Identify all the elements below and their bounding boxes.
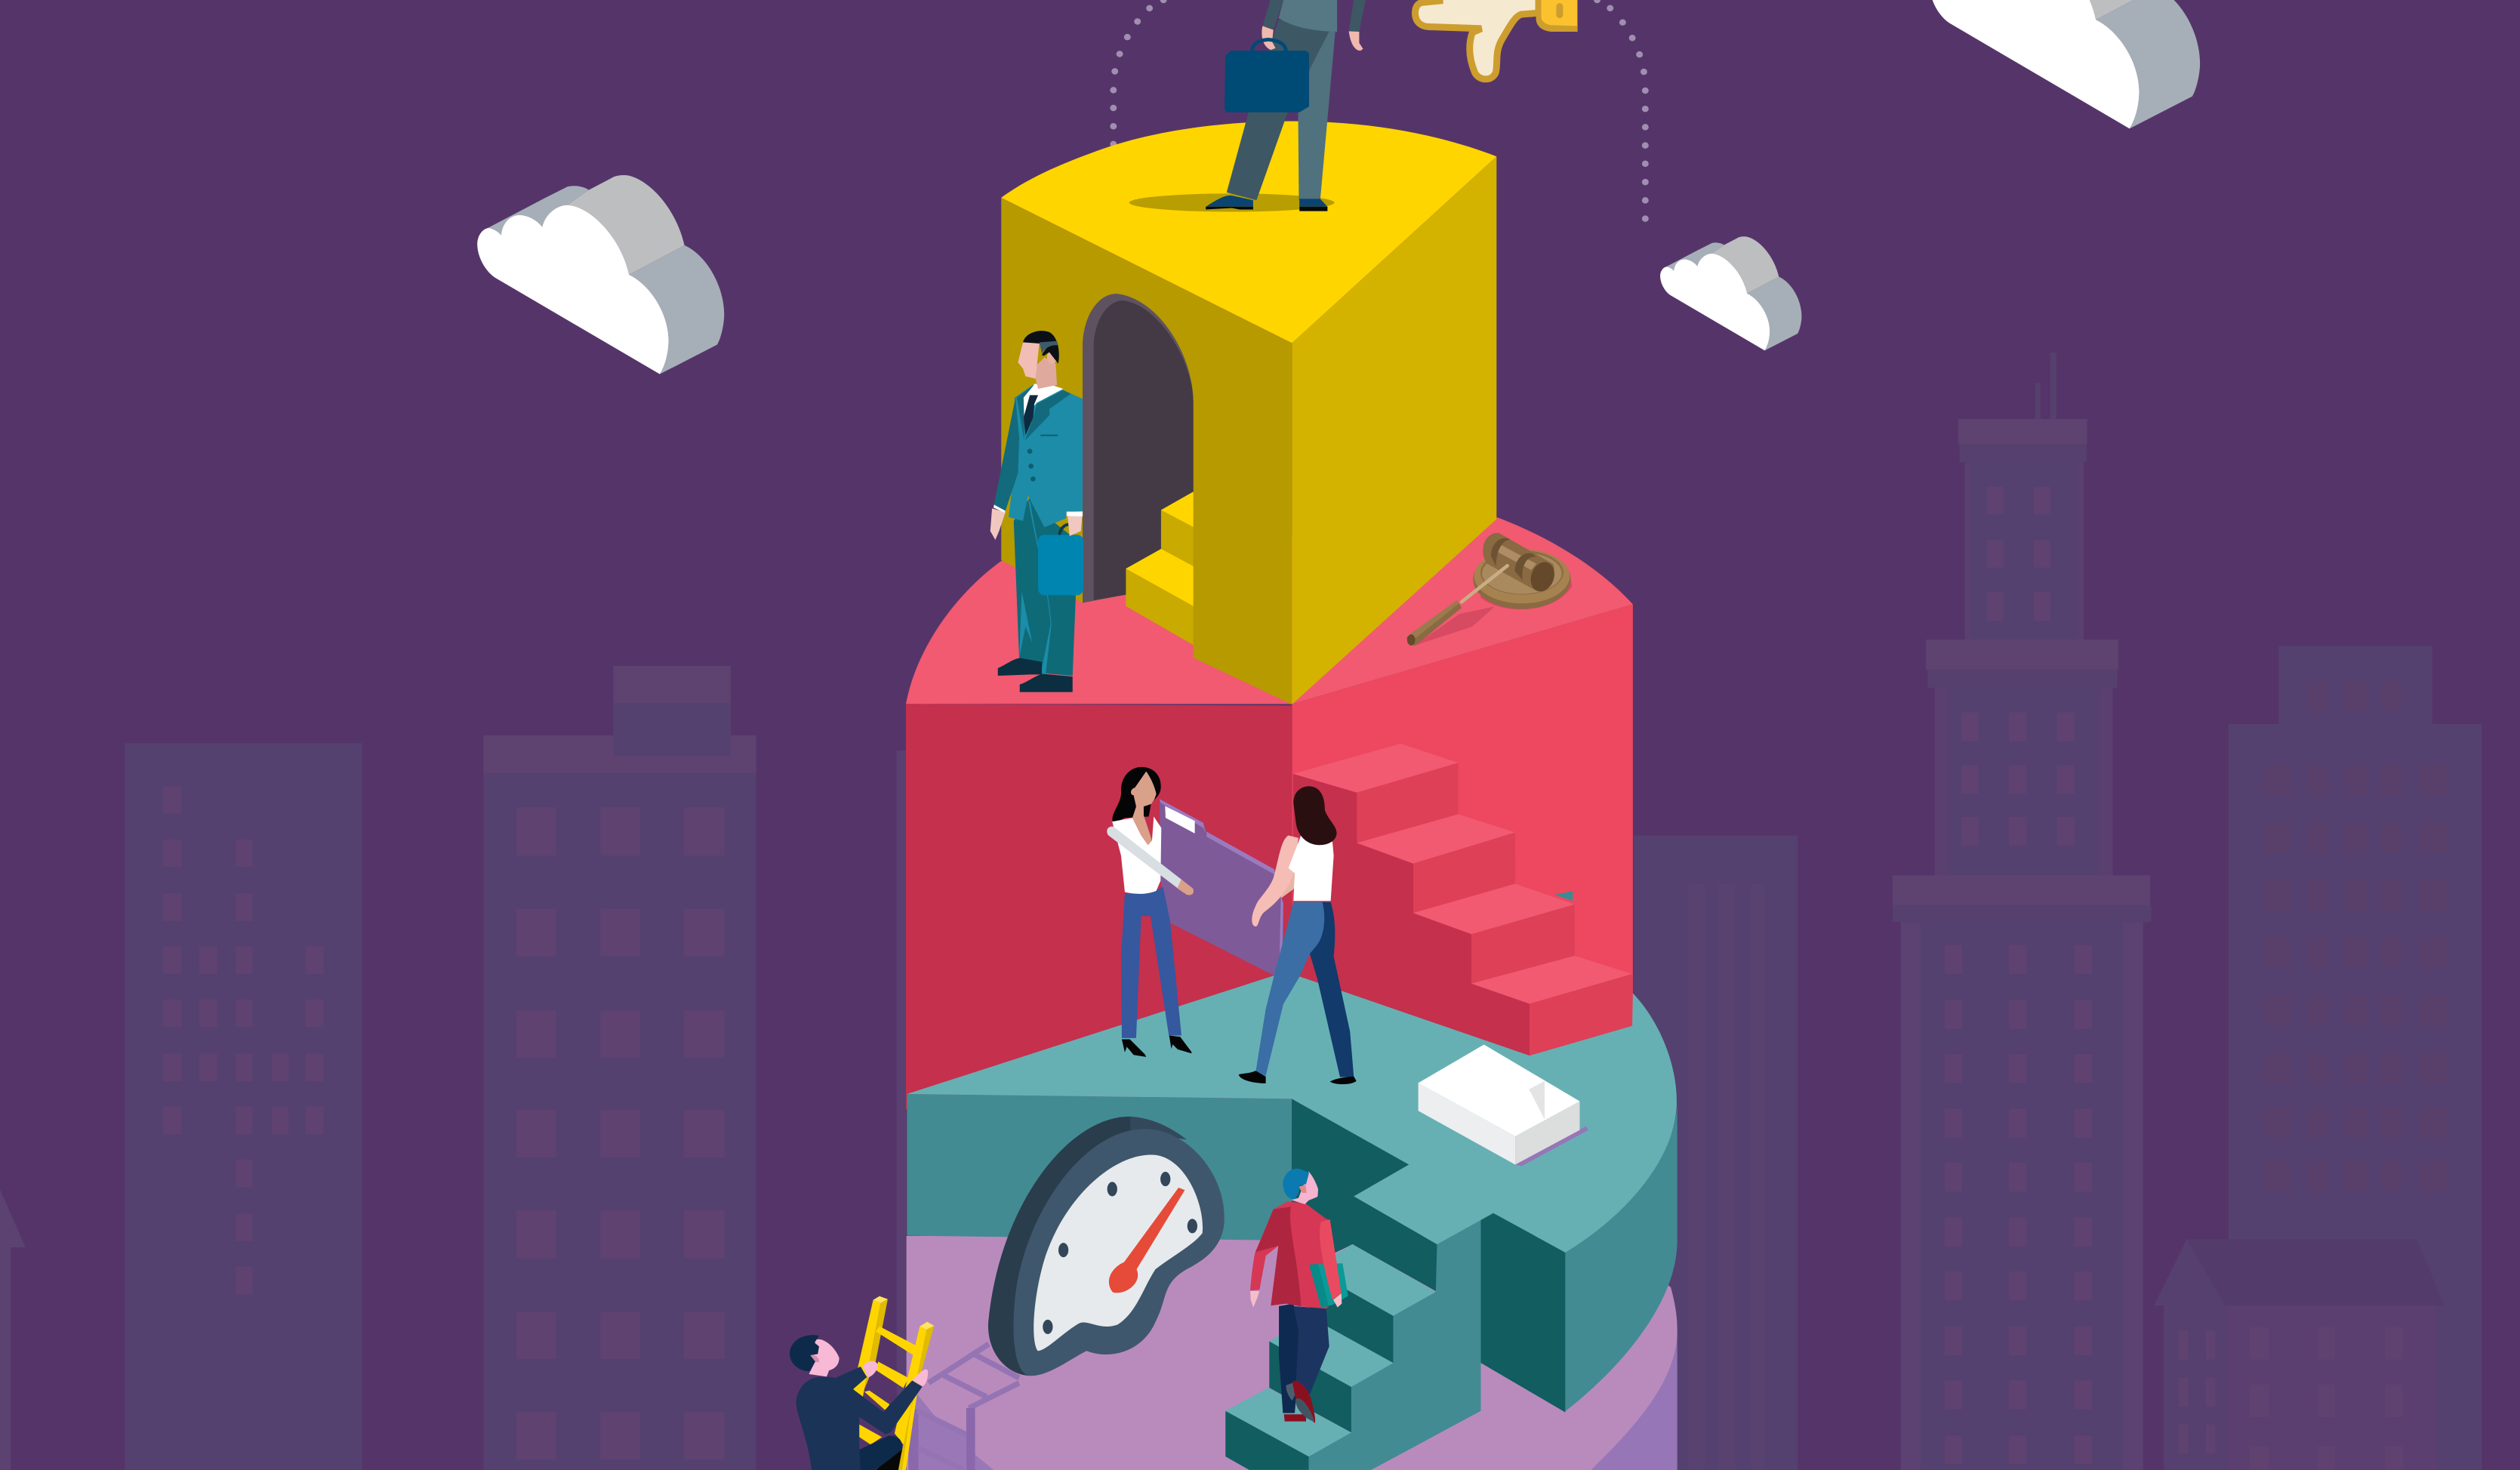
shadow under the top figure bbox=[1129, 193, 1334, 212]
tier: yellow block with arched door bbox=[1001, 122, 1496, 704]
low front building bbox=[2154, 1239, 2445, 1470]
tier: teal block with stairs bbox=[907, 975, 1677, 1470]
folder carried by the two women bbox=[1160, 799, 1283, 976]
figure: woman holding the folder bbox=[1107, 767, 1194, 1057]
red staircase bbox=[1293, 744, 1632, 1058]
figure: woman walking with the folder bbox=[1239, 786, 1357, 1084]
flat ladder and pit on the purple floor bbox=[908, 1344, 1019, 1470]
cloud: small right bbox=[1660, 236, 1801, 350]
icon: thumbs-down hand bbox=[1416, 0, 1578, 79]
building behind the stack bbox=[1634, 836, 1798, 1470]
icon: white box on the teal floor bbox=[1419, 1045, 1588, 1166]
figure: man in teal suit by the door bbox=[990, 331, 1083, 692]
arched doorway bbox=[1083, 294, 1194, 645]
ladder bbox=[848, 1296, 934, 1470]
figure: man with briefcase on top of the tower bbox=[1206, 0, 1366, 211]
icon: melting gauge bbox=[988, 1117, 1225, 1376]
cloud: left bbox=[477, 175, 724, 374]
tall tower bbox=[1893, 353, 2151, 1470]
skyline: right buildings and tower bbox=[1634, 353, 2481, 1470]
icon: gavel bbox=[1406, 533, 1572, 646]
cloud: top right bbox=[1930, 0, 2200, 128]
strip of building left of the stack bbox=[897, 750, 907, 1470]
figure: man climbing a yellow ladder bbox=[790, 1296, 934, 1470]
dotted arcs around the top of the tower bbox=[1110, 0, 1649, 222]
skyline: left buildings bbox=[0, 666, 756, 1470]
figure: man in red jacket on the stairs bbox=[1250, 1169, 1348, 1423]
tier: purple base bbox=[907, 1236, 1677, 1470]
tier: red block bbox=[906, 517, 1633, 1125]
wide stepped building bbox=[2229, 646, 2481, 1470]
